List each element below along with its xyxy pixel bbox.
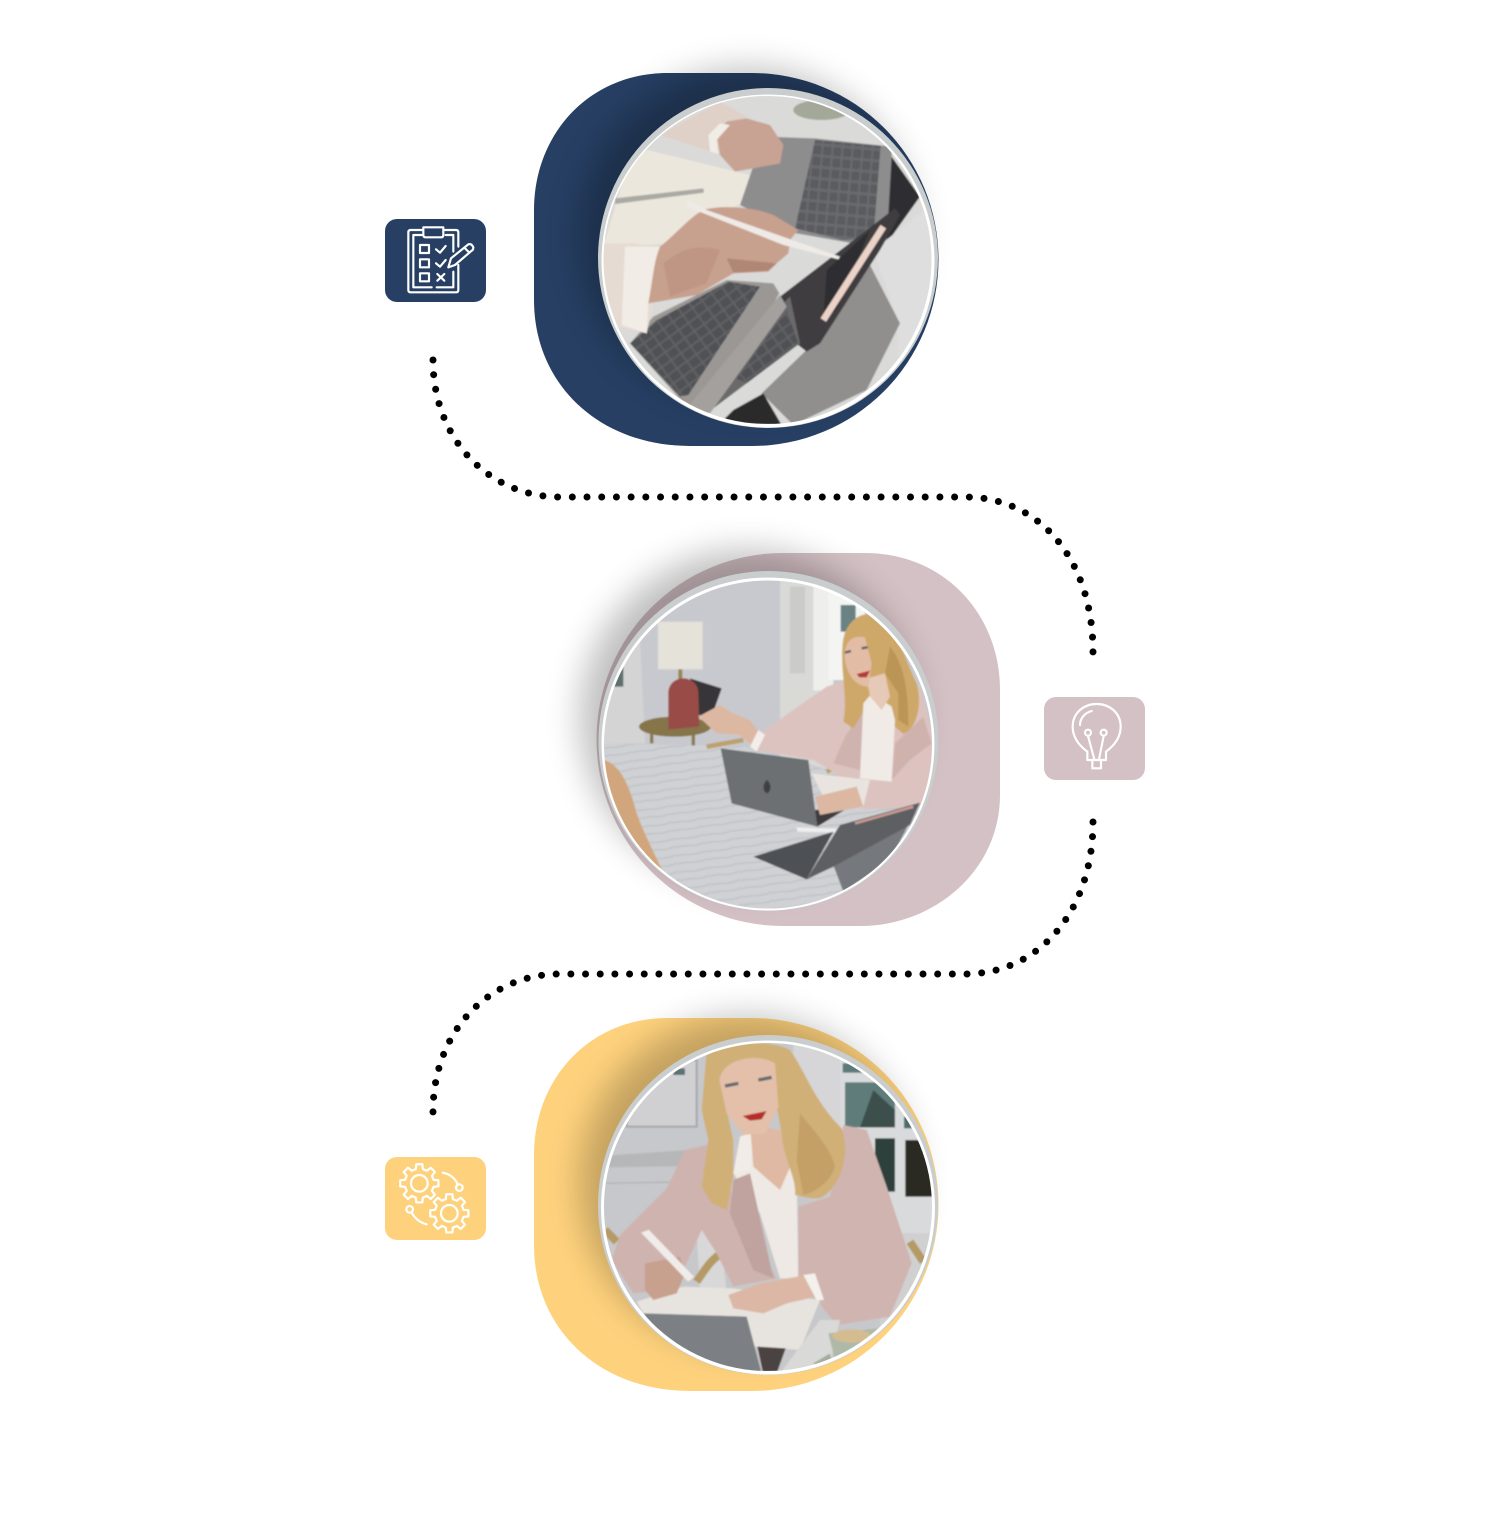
icon tile: light bulb (1044, 697, 1145, 780)
yellow backing shape (534, 1018, 938, 1391)
circle shadow (580, 550, 916, 886)
dotted connector: step 1 to step 2 (433, 360, 1093, 652)
circle shadow (580, 1015, 916, 1351)
panel: yellow step 3 (534, 1015, 953, 1400)
icon tile: gears (385, 1157, 486, 1240)
photo: hands with tablet and laptop (604, 96, 932, 424)
icon: light bulb (1073, 704, 1121, 768)
panel: navy step 1 (534, 68, 953, 450)
photo frame ring (598, 571, 938, 911)
circle shadow (580, 68, 916, 404)
icon tile: checklist (385, 219, 486, 302)
photo frame ring (598, 88, 938, 428)
photo: woman presenting at table with laptop (604, 580, 932, 908)
panel: pink step 2 (580, 550, 1000, 930)
icon: clipboard checklist with pen (408, 227, 473, 292)
pink backing shape (596, 553, 1000, 926)
photo: woman writing at desk (604, 1043, 932, 1371)
photo frame ring (598, 1035, 938, 1375)
dotted connector: step 2 to step 3 (433, 822, 1093, 1112)
icon: two gears with arrows (400, 1164, 468, 1232)
navy backing shape (534, 73, 938, 446)
